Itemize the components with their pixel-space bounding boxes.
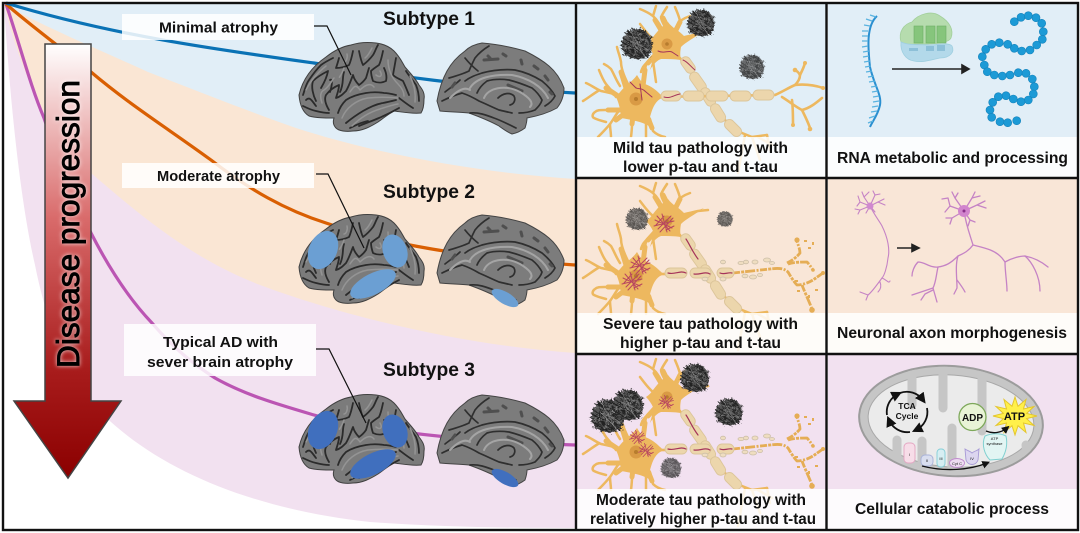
heading: subtype 3: Subtype 3 bbox=[383, 360, 475, 381]
label: typical AD: sever brain atrophy bbox=[147, 354, 294, 371]
ATP arrow bbox=[986, 428, 1007, 433]
label: minimal atrophy bbox=[122, 14, 314, 40]
icon: RNA strand bbox=[862, 15, 880, 127]
ADP circle: ADP bbox=[962, 413, 983, 424]
orange trajectory line bbox=[6, 4, 575, 265]
brains: subtype 2 bbox=[299, 214, 564, 311]
panel: cellular catabolic process: Cellular catabolic process bbox=[855, 501, 1049, 518]
electron transport complexes: I bbox=[909, 452, 910, 457]
purple subtype 3 area bbox=[4, 4, 575, 528]
panel: severe tau pathology: Severe tau pathology with bbox=[603, 316, 798, 333]
heading: subtype 1: Subtype 1 bbox=[383, 9, 475, 30]
brains: subtype 3 bbox=[299, 394, 564, 491]
ADP circle bbox=[959, 404, 986, 430]
panel: severe tau pathology: higher p-tau and t-tau bbox=[620, 335, 781, 352]
icon: large neuron bbox=[912, 192, 1048, 302]
panel: moderate tau pathology: relatively higher p-tau and t-tau bbox=[590, 511, 816, 528]
panel: severe tau pathology bbox=[577, 179, 826, 353]
electron transport complexes: II bbox=[926, 458, 928, 463]
panel: mild tau pathology: Mild tau pathology with bbox=[613, 140, 788, 157]
ATP star: ATP bbox=[1004, 411, 1025, 423]
panel: moderate tau pathology: Moderate tau pathology with bbox=[596, 492, 806, 509]
panel: RNA metabolic: RNA metabolic and processing bbox=[837, 150, 1068, 167]
panel: disease progression subtypes bbox=[4, 3, 575, 528]
orange subtype 2 area bbox=[4, 4, 575, 353]
blue subtype 1 area bbox=[4, 4, 575, 179]
label: moderate atrophy bbox=[122, 163, 314, 188]
arrow: growth bbox=[897, 244, 919, 252]
label: typical AD: Typical AD with bbox=[163, 334, 278, 351]
leader line: subtype 1 bbox=[314, 26, 351, 75]
electron transport complexes: Cyt C bbox=[952, 461, 962, 466]
panel: RNA metabolic bbox=[828, 4, 1077, 178]
icon: polypeptide beads bbox=[978, 12, 1047, 127]
panel: mild tau pathology bbox=[577, 4, 826, 178]
TCA cycle: TCA bbox=[898, 401, 916, 411]
proton arrow bbox=[922, 463, 987, 470]
panel: moderate tau pathology bbox=[577, 355, 826, 529]
leader line: subtype 3 bbox=[316, 349, 366, 423]
electron transport complexes: IV bbox=[970, 456, 974, 461]
electron transport complexes: III bbox=[939, 456, 943, 461]
TCA cycle: Cycle bbox=[896, 411, 919, 421]
leader line: subtype 2 bbox=[316, 174, 364, 248]
label: typical AD bbox=[124, 324, 316, 376]
heading: subtype 2: Subtype 2 bbox=[383, 182, 475, 203]
purple trajectory line bbox=[6, 4, 575, 445]
arrow: translation bbox=[892, 65, 969, 73]
ATP star bbox=[993, 397, 1037, 435]
label: moderate atrophy: Moderate atrophy bbox=[157, 168, 281, 185]
panel: cellular catabolic process bbox=[828, 355, 1077, 529]
icon: ribosome bbox=[900, 13, 953, 62]
panel: neuronal axon morphogenesis: Neuronal axon morphogenesis bbox=[837, 325, 1067, 342]
electron transport complexes bbox=[904, 434, 1007, 468]
panel: mild tau pathology: lower p-tau and t-tau bbox=[623, 159, 778, 176]
panel: neuronal axon morphogenesis bbox=[828, 179, 1077, 353]
TCA cycle bbox=[887, 392, 927, 432]
label: minimal atrophy: Minimal atrophy bbox=[159, 20, 279, 36]
electron transport complexes: synthase bbox=[986, 441, 1003, 446]
disease progression arrow: Disease progression bbox=[50, 80, 86, 368]
icon: mitochondrion bbox=[858, 364, 1044, 478]
blue trajectory line bbox=[6, 3, 575, 93]
disease progression arrow bbox=[14, 44, 121, 478]
icon: small neuron bbox=[855, 191, 890, 300]
electron transport complexes: ATP bbox=[991, 436, 999, 441]
brains: subtype 1 bbox=[299, 42, 564, 134]
